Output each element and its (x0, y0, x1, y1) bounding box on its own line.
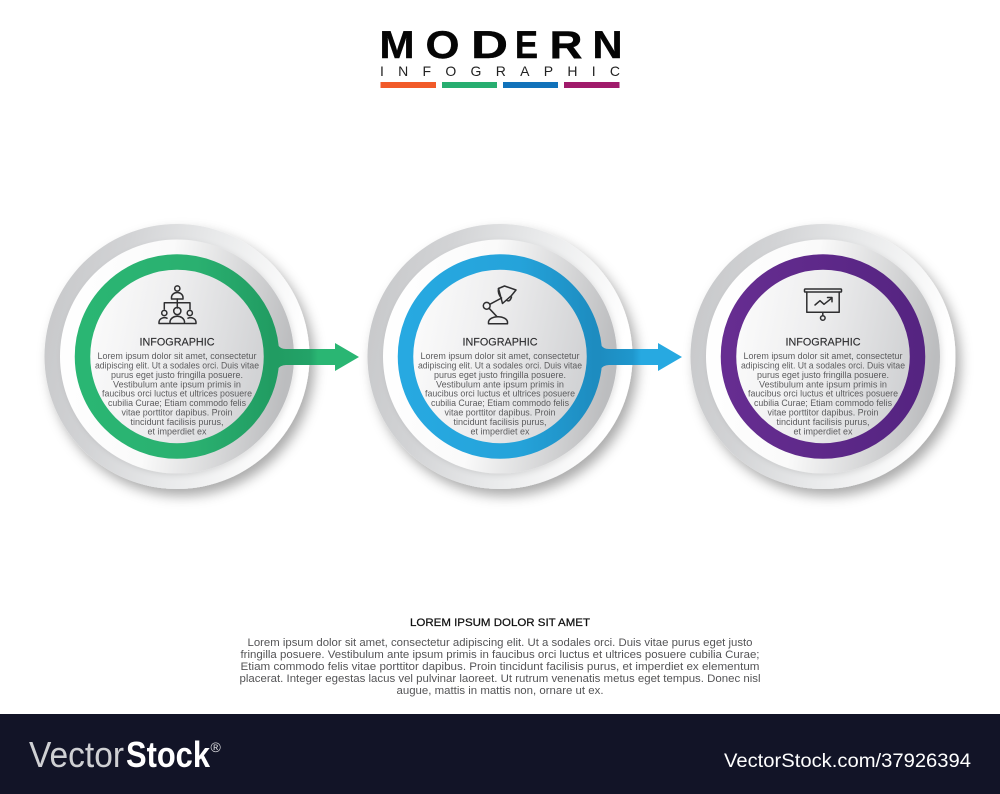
body text: et imperdiet ex (148, 427, 207, 437)
body text: tincidunt facilisis purus, (776, 417, 870, 427)
icon: desk lamp (483, 286, 516, 324)
inner disc (706, 240, 940, 474)
ring (728, 262, 918, 451)
body text: purus eget justo fringilla posuere. (757, 370, 889, 380)
ring (82, 262, 272, 451)
body text: vitae porttitor dapibus. Proin (444, 408, 556, 418)
arrow (600, 343, 682, 371)
body text: et imperdiet ex (794, 427, 853, 437)
bottom heading: LOREM IPSUM DOLOR SIT AMET (410, 617, 590, 629)
body text: Vestibulum ante ipsum primis in (759, 379, 887, 389)
arrow (277, 343, 359, 371)
label: INFOGRAPHIC (462, 337, 538, 349)
body text: adipiscing elit. Ut a sodales orci. Duis vitae (95, 360, 259, 370)
body text: cubilia Curae; Etiam commodo felis (431, 398, 569, 408)
body text: purus eget justo fringilla posuere. (111, 370, 243, 380)
outer disc (44, 224, 310, 489)
heading: MODERN: O (426, 24, 460, 67)
logo: Vector: Vector (29, 734, 124, 775)
bottom paragraph: fringilla posuere. Vestibulum ante ipsum primis in faucibus orci luctus et ultrices posuere cubilia Curae; (240, 649, 760, 661)
body text: Vestibulum ante ipsum primis in (113, 379, 241, 389)
bottom paragraph: augue, mattis in mattis non, ornare ut ex. (396, 685, 604, 697)
body text: faucibus orci luctus et ultrices posuere (425, 389, 575, 399)
outer disc (368, 224, 632, 489)
body text: faucibus orci luctus et ultrices posuere (748, 389, 898, 399)
body text: cubilia Curae; Etiam commodo felis (754, 398, 892, 408)
body text: Lorem ipsum dolor sit amet, consectetur (98, 351, 256, 361)
panel: step 3 purple (690, 224, 956, 489)
body text: tincidunt facilisis purus, (454, 417, 546, 427)
panel: step 1 green (44, 224, 359, 489)
body text: purus eget justo fringilla posuere. (434, 370, 566, 380)
body text: faucibus orci luctus et ultrices posuere (102, 389, 252, 399)
heading: MODERN: E (515, 24, 538, 67)
panel: step 2 blue (368, 224, 682, 489)
body text: Lorem ipsum dolor sit amet, consectetur (744, 351, 902, 361)
heading: MODERN (380, 24, 622, 67)
colour bars (380, 82, 620, 88)
bottom paragraph (240, 637, 760, 697)
body text: adipiscing elit. Ut a sodales orci. Duis vitae (418, 360, 582, 370)
heading: MODERN: M (380, 24, 414, 67)
footer bar (0, 714, 1000, 794)
footer url: VectorStock.com/37926394 (724, 750, 971, 772)
body text (95, 351, 259, 437)
bottom paragraph: Lorem ipsum dolor sit amet, consectetur adipiscing elit. Ut a sodales orci. Duis vitae purus eget justo (248, 637, 752, 649)
logo: Stock: Stock (126, 734, 211, 775)
body text: tincidunt facilisis purus, (130, 417, 224, 427)
logo: registered mark: ® (210, 739, 222, 755)
label: INFOGRAPHIC (786, 337, 861, 349)
inner disc (60, 240, 294, 474)
heading: MODERN: N (592, 24, 622, 67)
bottom paragraph: Etiam commodo felis vitae porttitor dapibus. Proin tincidunt facilisis purus, et imperdiet ex elementum (240, 661, 760, 673)
bottom paragraph: placerat. Integer egestas lacus vel pulvinar laoreet. Ut rutrum venenatis metus eget tempus. Donec nisl (240, 673, 760, 685)
body text: cubilia Curae; Etiam commodo felis (108, 398, 246, 408)
heading: MODERN: R (550, 24, 582, 67)
icon: hierarchy people (159, 286, 196, 324)
label: INFOGRAPHIC (140, 337, 215, 349)
title (380, 24, 622, 88)
icon: presentation board (804, 289, 842, 320)
body text: et imperdiet ex (470, 427, 530, 437)
body text: vitae porttitor dapibus. Proin (768, 408, 878, 418)
ring (406, 262, 594, 451)
body text: Lorem ipsum dolor sit amet, consectetur (420, 351, 580, 361)
body text: Vestibulum ante ipsum primis in (436, 379, 564, 389)
inner disc (383, 240, 617, 474)
subheading: INFOGRAPHIC: INFOGRAPHIC (380, 63, 620, 79)
body text: vitae porttitor dapibus. Proin (122, 408, 232, 418)
outer disc (690, 224, 956, 489)
body text (418, 351, 582, 437)
bottom text block (240, 617, 760, 697)
heading: MODERN: D (471, 24, 508, 67)
body text (741, 351, 905, 437)
body text: adipiscing elit. Ut a sodales orci. Duis vitae (741, 360, 905, 370)
